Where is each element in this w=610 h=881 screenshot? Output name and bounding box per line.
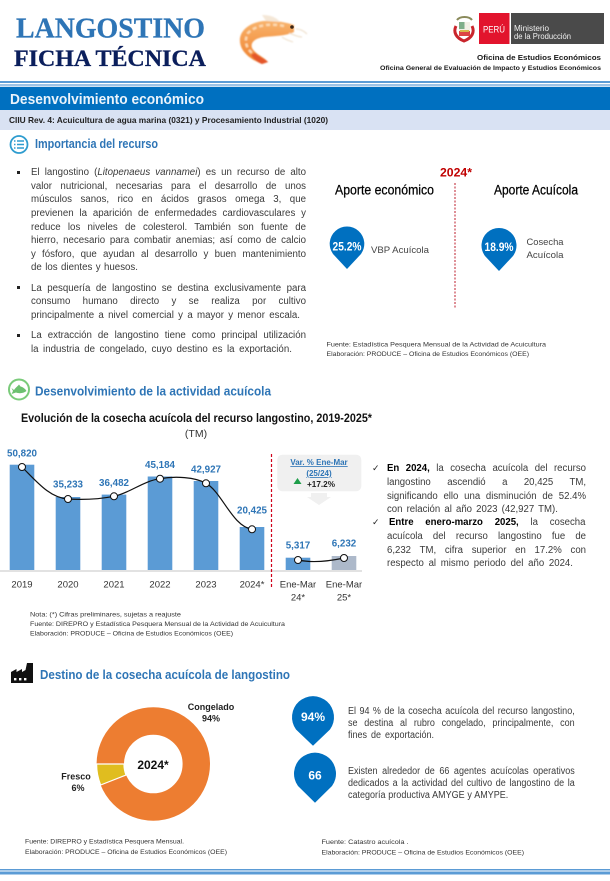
- title: Langostino Ficha Técnica: FICHA TÉCNICA: [14, 46, 206, 72]
- office names: [380, 53, 602, 72]
- text block: análisis de cosecha: significando ello una disminución de 52.4%: [386, 491, 586, 502]
- bar chart: cosecha: 2019: [11, 580, 33, 590]
- text block: importancia: músculos sanos, rico en ácidos grasos omega 3, que: [31, 194, 306, 205]
- donut chart: destino: 6%: [71, 783, 85, 793]
- icon: list: [10, 136, 28, 153]
- heading: Aporte económico: Aporte económico: [335, 182, 434, 198]
- pin: 18.9%: 18.9%: [484, 242, 514, 254]
- text block: análisis de cosecha: acuícola del recurso langostino fue de: [386, 531, 586, 542]
- icon: factory: [11, 663, 33, 683]
- heading: Aporte Acuícola: Aporte Acuícola: [494, 182, 578, 198]
- icon: fish: [9, 380, 29, 400]
- text block: análisis de cosecha: En 2024, la cosecha acuícola del recurso: [386, 463, 586, 474]
- text: 94% congelado: se destina al rubro congelado, principalmente, con: [348, 718, 575, 729]
- logo: Perú Ministerio de la Producción: Ministerio: [514, 24, 550, 33]
- chart title: (TM): [185, 428, 207, 440]
- text block: análisis de cosecha: ✓: [372, 464, 380, 474]
- text block: análisis de cosecha: ✓: [372, 518, 380, 528]
- label: Cosecha Acuícola: Cosecha: [526, 237, 564, 248]
- bar chart: cosecha: 5,317: [286, 540, 311, 552]
- logo: Perú Ministerio de la Producción: de la Producción: [514, 32, 571, 41]
- chart title: Evolución de la cosecha acuícola del recurso langostino, 2019-2025*: [21, 411, 372, 425]
- bar chart: cosecha: 25*: [337, 592, 351, 604]
- logo: Perú Ministerio de la Producción: PERÚ: [483, 24, 505, 35]
- pin: 25.2%: [330, 227, 364, 269]
- bar chart: cosecha: 36,482: [99, 478, 130, 489]
- callout: variation: Var. % Ene-Mar: [290, 458, 348, 467]
- text block: análisis de cosecha: langostino ascendió a 20,425 TM,: [386, 477, 586, 488]
- bar chart: cosecha: 2023: [195, 580, 217, 590]
- text block: análisis de cosecha: 6,232 TM, cifra superior en 17.2% con: [386, 545, 586, 556]
- bar chart: cosecha: Ene-Mar: [280, 580, 316, 590]
- bar chart: cosecha: [0, 448, 362, 604]
- donut chart: destino: Congelado: [188, 702, 235, 712]
- text block: importancia: La extracción de langostino tiene como principal utilización: [31, 330, 306, 341]
- label: Cosecha Acuícola: Acuícola: [526, 250, 564, 261]
- year label: 2024*: [440, 166, 472, 180]
- text block: importancia: principalmente a nivel comercial y a mayor y menor escala.: [31, 310, 300, 321]
- title: Langostino Ficha Técnica: LANGOSTINO: [16, 12, 205, 44]
- callout: variation: +17.2%: [307, 480, 335, 489]
- banner: Desenvolvimiento económico: [0, 87, 610, 110]
- text: 94% congelado: El 94 % de la cosecha acuícola del recurso langostino,: [348, 706, 575, 717]
- chart notes: Fuente: DIREPRO y Estadística Pesquera Mensual de la Actividad de Acuicultura: [30, 621, 285, 628]
- bar chart: cosecha: 2021: [103, 580, 125, 590]
- source: Fuente: Estadística Pesquera Mensual de la Actividad de Acuicultura: [326, 342, 546, 348]
- source: donut: Elaboración: PRODUCE – Oficina de Estudios Económicos (OEE): [25, 849, 227, 856]
- title: Langostino Ficha Técnica: [14, 12, 206, 72]
- heading: Desenvolvimiento de la actividad acuícola: Desenvolvimiento de la actividad acuícola: [35, 384, 272, 398]
- bar chart: cosecha: Ene-Mar: [326, 580, 362, 590]
- text block: importancia: La pesquería de langostino se destina exclusivamente para: [31, 283, 306, 294]
- bar chart: cosecha: 50,820: [7, 448, 38, 460]
- bar chart: cosecha: 20,425: [237, 506, 268, 516]
- text block: importancia: valor nutricional, necesarias para el desarrollo de unos: [31, 181, 306, 192]
- subheader: CIIU: CIIU Rev. 4: Acuicultura de agua marina (0321) y Procesamiento Industrial (1020): [9, 115, 328, 125]
- bar chart: cosecha: 24*: [291, 592, 305, 604]
- donut chart: destino: [61, 702, 235, 807]
- text block: importancia: y fósforo, que ayudan al desarrollo y buen mantenimiento: [31, 249, 306, 260]
- label: Cosecha Acuícola: [526, 237, 564, 261]
- text: 66 agentes: dedicados a la actividad del cultivo de langostino de la: [348, 778, 575, 789]
- source: catastro: [322, 839, 524, 856]
- logo: Perú Ministerio de la Producción: [455, 13, 604, 44]
- text block: importancia: la industria de congelado, cuyo destino es la exportación.: [31, 344, 292, 355]
- heading: Importancia del recurso: Importancia del recurso: [35, 137, 158, 151]
- text block: importancia: El langostino (Litopenaeus vannamei) es un recurso de alto: [31, 167, 306, 178]
- text block: análisis de cosecha: [372, 463, 586, 569]
- text block: importancia: hierro, necesario para combatir anemias; así como de calcio: [31, 235, 306, 246]
- chart notes: Elaboración: PRODUCE – Oficina de Estudios Económicos (OEE): [30, 630, 233, 638]
- source: donut: Fuente: DIREPRO y Estadística Pesquera Mensual.: [25, 838, 184, 846]
- text block: importancia: [17, 167, 306, 355]
- label: VBP Acuícola: VBP Acuícola: [371, 245, 430, 256]
- pin: 94%: 94%: [301, 710, 325, 724]
- chart notes: [30, 612, 285, 638]
- text block: análisis de cosecha: respecto al mismo periodo del año 2024.: [386, 558, 572, 569]
- pin: 66: 66: [308, 768, 322, 782]
- donut chart: destino: 2024*: [137, 758, 169, 772]
- icon: coat of arms: [455, 17, 473, 41]
- donut chart: destino: 94%: [202, 714, 220, 724]
- bar chart: cosecha: 42,927: [191, 464, 222, 476]
- source: catastro: Elaboración: PRODUCE – Oficina de Estudios Económicos (OEE): [322, 850, 524, 856]
- source: catastro: Fuente: Catastro acuícola .: [322, 839, 409, 846]
- callout: variation: (25/24): [306, 469, 332, 478]
- chart title: [21, 411, 372, 440]
- text block: importancia: consumo humano directo y se realiza por cultivo: [31, 296, 306, 307]
- source: donut: [25, 838, 227, 856]
- pin: 18.9%: [482, 228, 516, 271]
- text block: importancia: reduce los niveles de colesterol. También son fuente de: [31, 222, 306, 233]
- bar chart: cosecha: 2020: [57, 580, 79, 590]
- text: 66 agentes: Existen alrededor de 66 agentes acuícolas operativos: [348, 766, 575, 777]
- source: Elaboración: PRODUCE – Oficina de Estudios Económicos (OEE): [326, 351, 529, 358]
- office names: Oficina General de Evaluación de Impacto y Estudios Económicos: [380, 65, 602, 72]
- panel: aporte 2024: [326, 166, 578, 358]
- text: 94% congelado: fines de exportación.: [348, 730, 434, 741]
- chart notes: Nota: (*) Cifras preliminares, sujetas a reajuste: [30, 612, 181, 618]
- text: 66 agentes: [348, 766, 575, 801]
- pin: 94%: [292, 696, 334, 746]
- text: 94% congelado: [348, 706, 575, 741]
- source: [326, 342, 546, 358]
- text block: análisis de cosecha: Entre enero-marzo 2025, la cosecha: [389, 517, 585, 528]
- heading: Destino de la cosecha: Destino de la cosecha acuícola de langostino: [40, 668, 290, 682]
- pin: 66: [294, 753, 336, 803]
- office names: Oficina de Estudios Económicos: [477, 53, 601, 62]
- callout: variation: [277, 455, 361, 505]
- donut chart: destino: Fresco: [61, 772, 91, 782]
- bar chart: cosecha: 2022: [149, 580, 171, 590]
- bar chart: cosecha: 2024*: [240, 580, 265, 590]
- bar chart: cosecha: 45,184: [145, 460, 176, 471]
- bar chart: cosecha: 35,233: [53, 480, 84, 490]
- subheader: CIIU: [0, 110, 610, 130]
- text block: importancia: de los dientes y huesos.: [31, 262, 138, 273]
- text block: importancia: previenen la aparición de enfermedades cardiovasculares y: [31, 208, 306, 219]
- icon: shrimp: [240, 15, 307, 64]
- pin: 25.2%: 25.2%: [332, 242, 362, 254]
- text block: análisis de cosecha: con relación al año 2023 (42,927 TM).: [386, 504, 557, 515]
- text: 66 agentes: categoría productiva AMYGE y AMYPE.: [348, 790, 508, 801]
- bar chart: cosecha: 6,232: [332, 538, 357, 550]
- banner: Desenvolvimiento económico: Desenvolvimiento económico: [10, 92, 204, 108]
